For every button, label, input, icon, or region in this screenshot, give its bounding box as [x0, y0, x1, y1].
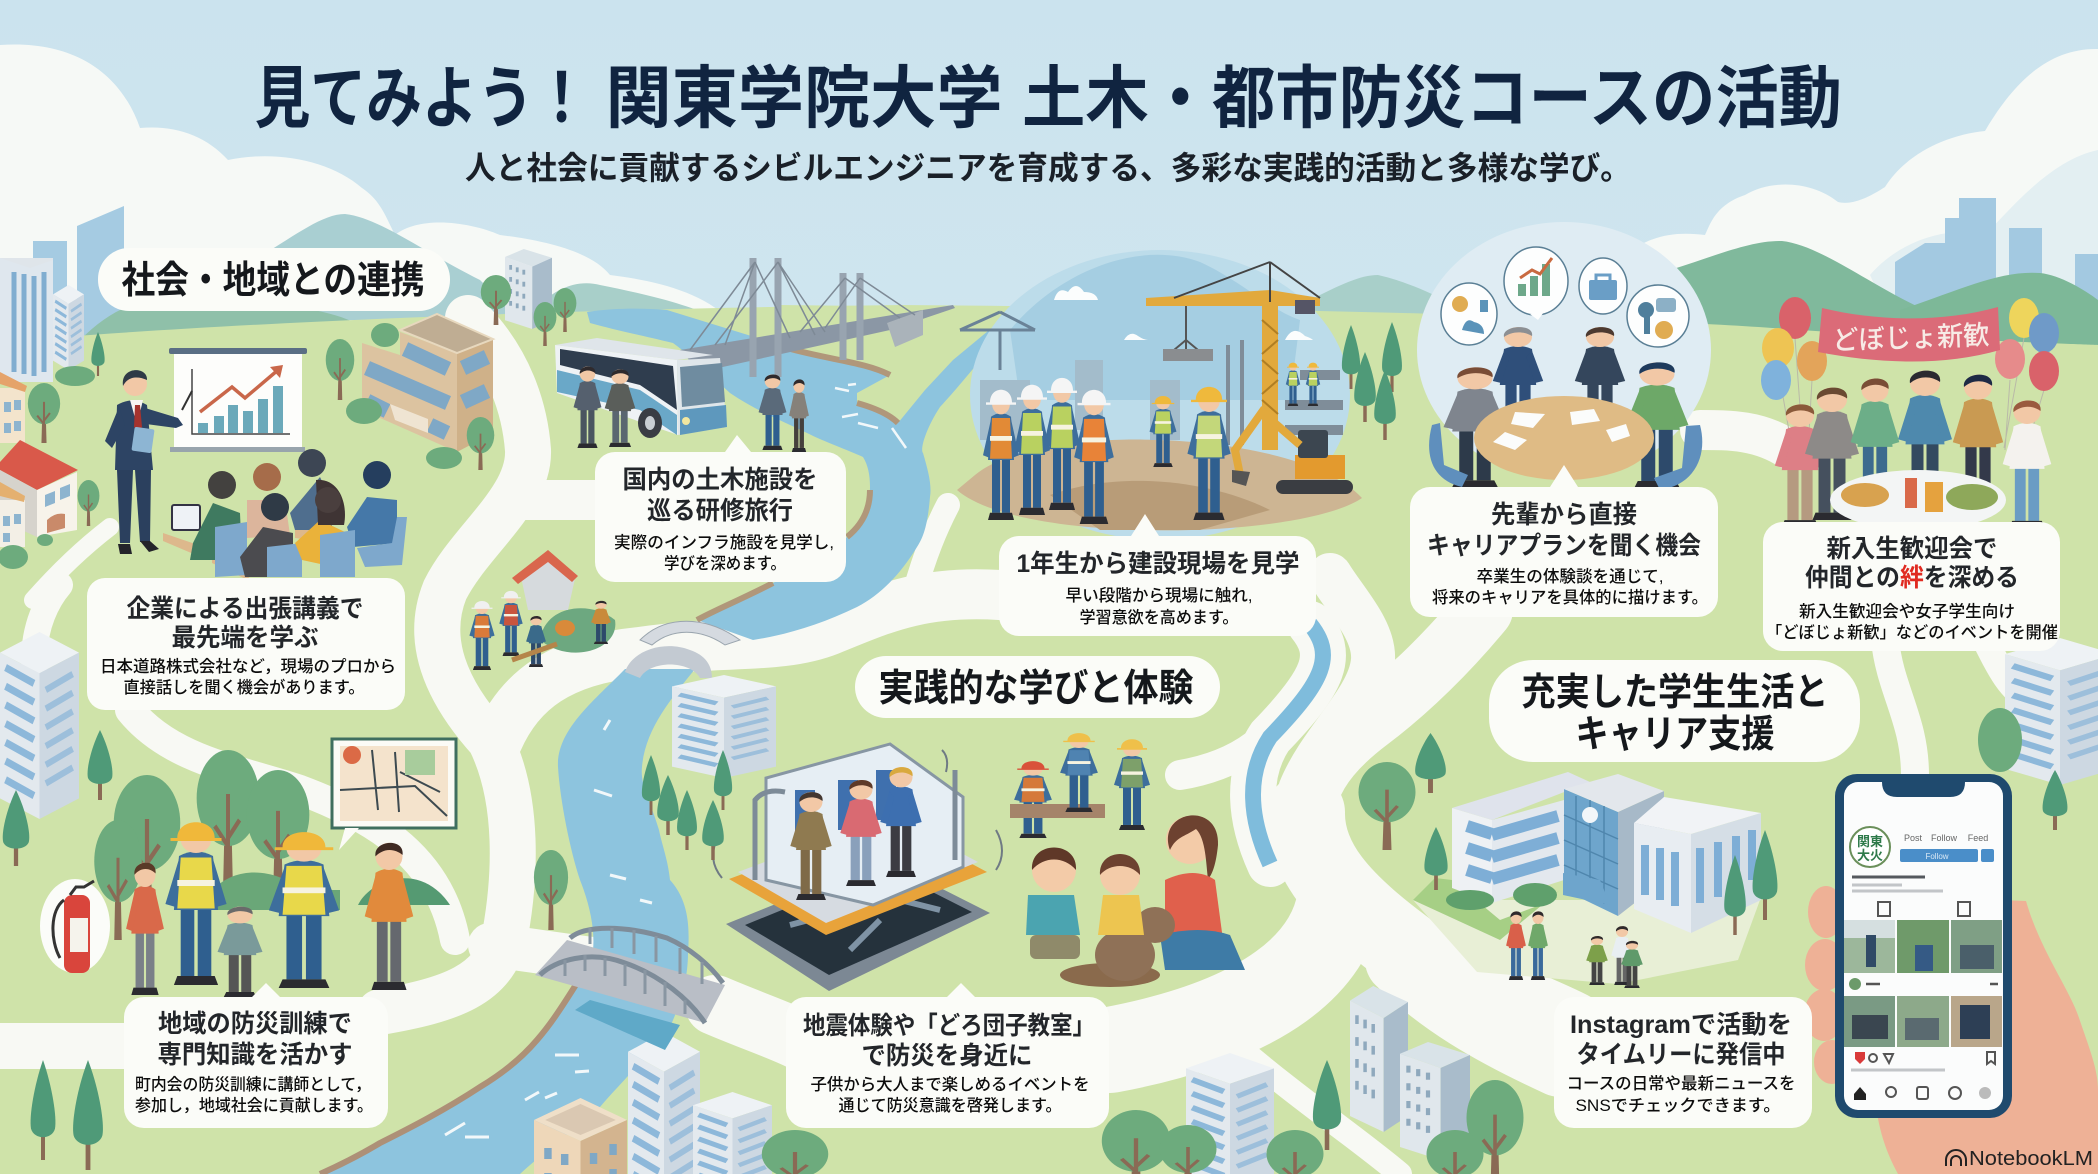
card: quake and mud ball: 地震体験や「どろ団子教室」 — [803, 1012, 1095, 1040]
thin river — [1253, 624, 1323, 864]
river bank land — [780, 305, 1017, 423]
scattered towers and trees — [0, 632, 2098, 1174]
river upper — [587, 297, 1042, 640]
card: quake and mud ball: で防災を身近に — [862, 1042, 1032, 1070]
card: welcome party: 新入生歓迎会や女子学生向け — [1799, 602, 2015, 621]
career scene — [1417, 222, 1711, 490]
section heading: practice — [855, 656, 1220, 718]
section heading: student life: キャリア支援 — [1576, 714, 1774, 756]
table — [1474, 396, 1654, 480]
title — [254, 61, 1842, 137]
tower: lower middle — [1186, 1053, 1274, 1174]
stone arches — [625, 621, 740, 678]
campus trees — [1358, 762, 1416, 850]
tab icons — [1878, 902, 1970, 916]
platform — [729, 820, 987, 935]
desks and students — [163, 449, 407, 580]
ground — [0, 305, 2098, 1174]
steel structure — [1226, 340, 1343, 450]
workers — [983, 363, 1320, 524]
card: career talk: キャリアプランを聞く機会 — [1427, 532, 1701, 560]
campus — [1358, 733, 1787, 988]
presenter — [105, 370, 192, 554]
tower: lower right pair 1 — [1350, 986, 1408, 1132]
welcome party scene — [1761, 297, 2059, 530]
card: instagram: SNSでチェックできます。 — [1576, 1096, 1780, 1115]
building: brown office — [362, 314, 493, 452]
card: company lecture: 最先端を学ぶ — [172, 624, 318, 652]
party people — [1775, 371, 2051, 528]
section heading: student life: 充実した学生生活と — [1522, 672, 1828, 714]
card: site visit: 1年生から建設現場を見学 — [1016, 550, 1300, 578]
food table — [1830, 470, 2006, 530]
card: study trip: 巡る研修旅行 — [647, 497, 793, 525]
card: instagram: Instagramで活動を — [1570, 1011, 1792, 1039]
card: company lecture — [87, 578, 405, 710]
inner cloud shade right — [1870, 150, 2098, 340]
card: career talk: 卒業生の体験談を通じて, — [1476, 567, 1664, 586]
icon bubble: chart — [1504, 247, 1568, 320]
card: disaster drill: 町内会の防災訓練に講師として， — [135, 1075, 371, 1094]
quake simulator — [713, 744, 1002, 991]
profile stats: Follow — [1931, 833, 1957, 843]
vignette circle — [1417, 222, 1711, 478]
card: quake and mud ball: 子供から大人まで楽しめるイベントを — [810, 1075, 1090, 1094]
campus people — [1506, 911, 1643, 988]
mud splat — [1060, 963, 1160, 987]
card: disaster drill — [124, 983, 388, 1128]
water highlights — [835, 384, 906, 448]
mountains — [80, 214, 2098, 370]
follow button: Follow — [1925, 852, 1949, 861]
tower: right edge — [2005, 638, 2098, 785]
hand behind phone — [1804, 886, 2098, 1174]
tower: lower right pair 2 — [1400, 1042, 1470, 1160]
chairs — [1429, 423, 1702, 490]
action icons — [1855, 1052, 1995, 1064]
card: welcome party: 「どぼじょ新歓」などのイベントを開催 — [1766, 623, 2058, 642]
banner — [1818, 307, 2000, 362]
profile lines — [1852, 876, 1925, 878]
cabin — [766, 744, 963, 905]
title: 関東学院大学 — [606, 61, 1002, 137]
title: 土木・都市防災コースの活動 — [1022, 61, 1842, 137]
profile logo — [1850, 827, 1890, 867]
profile logo: 大火 — [1857, 848, 1883, 863]
cable-stayed bridge — [680, 258, 955, 377]
chart board — [169, 348, 307, 452]
tower: left middle — [0, 632, 79, 819]
city silhouette right — [1895, 198, 2098, 334]
building: small grey tower — [505, 249, 552, 329]
card: disaster drill: 参加し，地域社会に貢献します。 — [135, 1096, 373, 1115]
phone — [1835, 774, 2012, 1118]
pine trees centre — [1342, 322, 1402, 440]
group right of bus — [759, 374, 809, 452]
tower: bottom centre tan — [534, 1098, 627, 1174]
section heading: community — [98, 248, 450, 311]
papers — [1493, 409, 1630, 450]
NotebookLM watermark: NotebookLM — [1969, 1148, 2093, 1170]
left wing — [1452, 772, 1590, 903]
card: career talk: 将来のキャリアを具体的に描けます。 — [1432, 588, 1708, 607]
profile stats: Feed — [1968, 833, 1988, 843]
card: study trip: 学びを深めます。 — [664, 554, 786, 573]
vignette mountain — [1010, 255, 1300, 400]
card: welcome party: 仲間との絆を深める — [1805, 564, 2019, 592]
card: welcome party — [1763, 522, 2060, 651]
group left of bus — [574, 367, 635, 448]
disaster drill scene — [94, 739, 456, 997]
map bubble — [332, 739, 456, 850]
clouds left — [0, 44, 730, 320]
base — [726, 860, 990, 991]
photo grid top — [1844, 920, 2002, 973]
balloon strings — [1778, 338, 2044, 450]
card: instagram: タイムリーに発信中 — [1576, 1041, 1786, 1069]
small account row — [1849, 978, 1998, 990]
campus lawn — [1413, 900, 1760, 984]
icon bubble: briefcase — [1579, 258, 1627, 314]
right wing — [1634, 797, 1761, 933]
follow button — [1900, 849, 1994, 862]
mini clouds — [1054, 286, 1313, 340]
city silhouette left — [33, 206, 182, 373]
hedge base — [1413, 878, 1560, 940]
distant crane — [960, 312, 1035, 370]
building: left tower — [0, 258, 53, 382]
construction vignette — [957, 250, 1362, 540]
card: instagram — [1554, 997, 1812, 1128]
central glass — [1563, 774, 1664, 916]
banner: どぼじょ新歓 — [1832, 320, 1990, 356]
title: 見てみよう！ — [254, 61, 590, 137]
profile stats: Post — [1904, 833, 1923, 843]
card: career talk: 先輩から直接 — [1491, 501, 1637, 529]
bus scene — [555, 338, 809, 452]
hedges — [1446, 883, 1557, 910]
section heading: community: 社会・地域との連携 — [122, 260, 424, 302]
card: career talk — [1410, 465, 1718, 617]
icon bubble: people — [1441, 283, 1497, 345]
section heading: student life — [1489, 660, 1860, 762]
card: company lecture: 企業による出張講義で — [126, 595, 364, 623]
building: left secondary tower — [53, 285, 84, 370]
river main — [320, 669, 695, 1174]
small site scene — [469, 550, 615, 670]
truss bridge — [535, 928, 725, 1050]
card: site visit — [999, 514, 1316, 636]
card: study trip: 国内の土木施設を — [622, 466, 818, 494]
presentation scene — [105, 348, 407, 580]
card: company lecture: 直接話しを聞く機会があります。 — [124, 677, 364, 697]
subtitle: 人と社会に貢献するシビルエンジニアを育成する、多彩な実践的活動と多様な学び。 — [465, 150, 1631, 186]
tower: bottom centre tall — [628, 1032, 700, 1174]
seated people — [790, 767, 922, 900]
photo grid bottom — [1844, 996, 2002, 1047]
clouds right — [1620, 49, 2098, 340]
background city — [980, 360, 1180, 440]
card: quake and mud ball — [786, 983, 1109, 1128]
balloons — [1761, 297, 2059, 400]
houses left — [0, 372, 99, 569]
river bank edges — [697, 348, 898, 620]
trees — [3, 708, 2067, 1174]
tower: central small — [672, 675, 776, 778]
boy — [1026, 848, 1080, 959]
card: company lecture: 日本道路株式会社など，現場のプロから — [100, 657, 396, 676]
card: disaster drill: 地域の防災訓練で — [158, 1010, 352, 1038]
card: study trip: 実際のインフラ施設を見学し, — [614, 533, 834, 552]
left pine and shrub — [55, 332, 105, 386]
mud ball — [1095, 929, 1155, 981]
card: welcome party: 新入生歓迎会で — [1826, 535, 1998, 563]
trees around grey tower — [481, 275, 576, 346]
city blocks and trees group left — [0, 249, 576, 569]
workers — [126, 822, 413, 997]
section heading: practice: 実践的な学びと体験 — [878, 668, 1194, 710]
motion marks — [713, 750, 1002, 878]
mother — [1135, 815, 1245, 970]
profile stats — [1904, 833, 1988, 843]
excavator — [1232, 412, 1353, 494]
card: study trip — [595, 435, 846, 582]
tower: bottom centre short — [693, 1092, 772, 1174]
nav icons — [1854, 1087, 1991, 1100]
bus — [555, 338, 727, 438]
icon bubble: key — [1627, 285, 1689, 347]
card: instagram: コースの日常や最新ニュースを — [1566, 1074, 1796, 1093]
tower crane — [1146, 262, 1320, 450]
fire extinguisher bubble — [40, 879, 110, 973]
profile logo: 関東 — [1857, 834, 1883, 849]
trees behind — [94, 750, 450, 940]
trees around office — [326, 339, 494, 470]
roads — [0, 318, 2030, 1174]
card: quake and mud ball: 通じて防災意識を啓発します。 — [838, 1096, 1062, 1115]
people — [1493, 327, 1543, 435]
card: site visit: 早い段階から現場に触れ, — [1066, 586, 1252, 605]
kids mud scene — [1010, 733, 1245, 987]
card: site visit: 学習意欲を高めます。 — [1080, 608, 1238, 627]
child — [1098, 854, 1144, 935]
card: disaster drill: 専門知識を活かす — [158, 1041, 352, 1069]
